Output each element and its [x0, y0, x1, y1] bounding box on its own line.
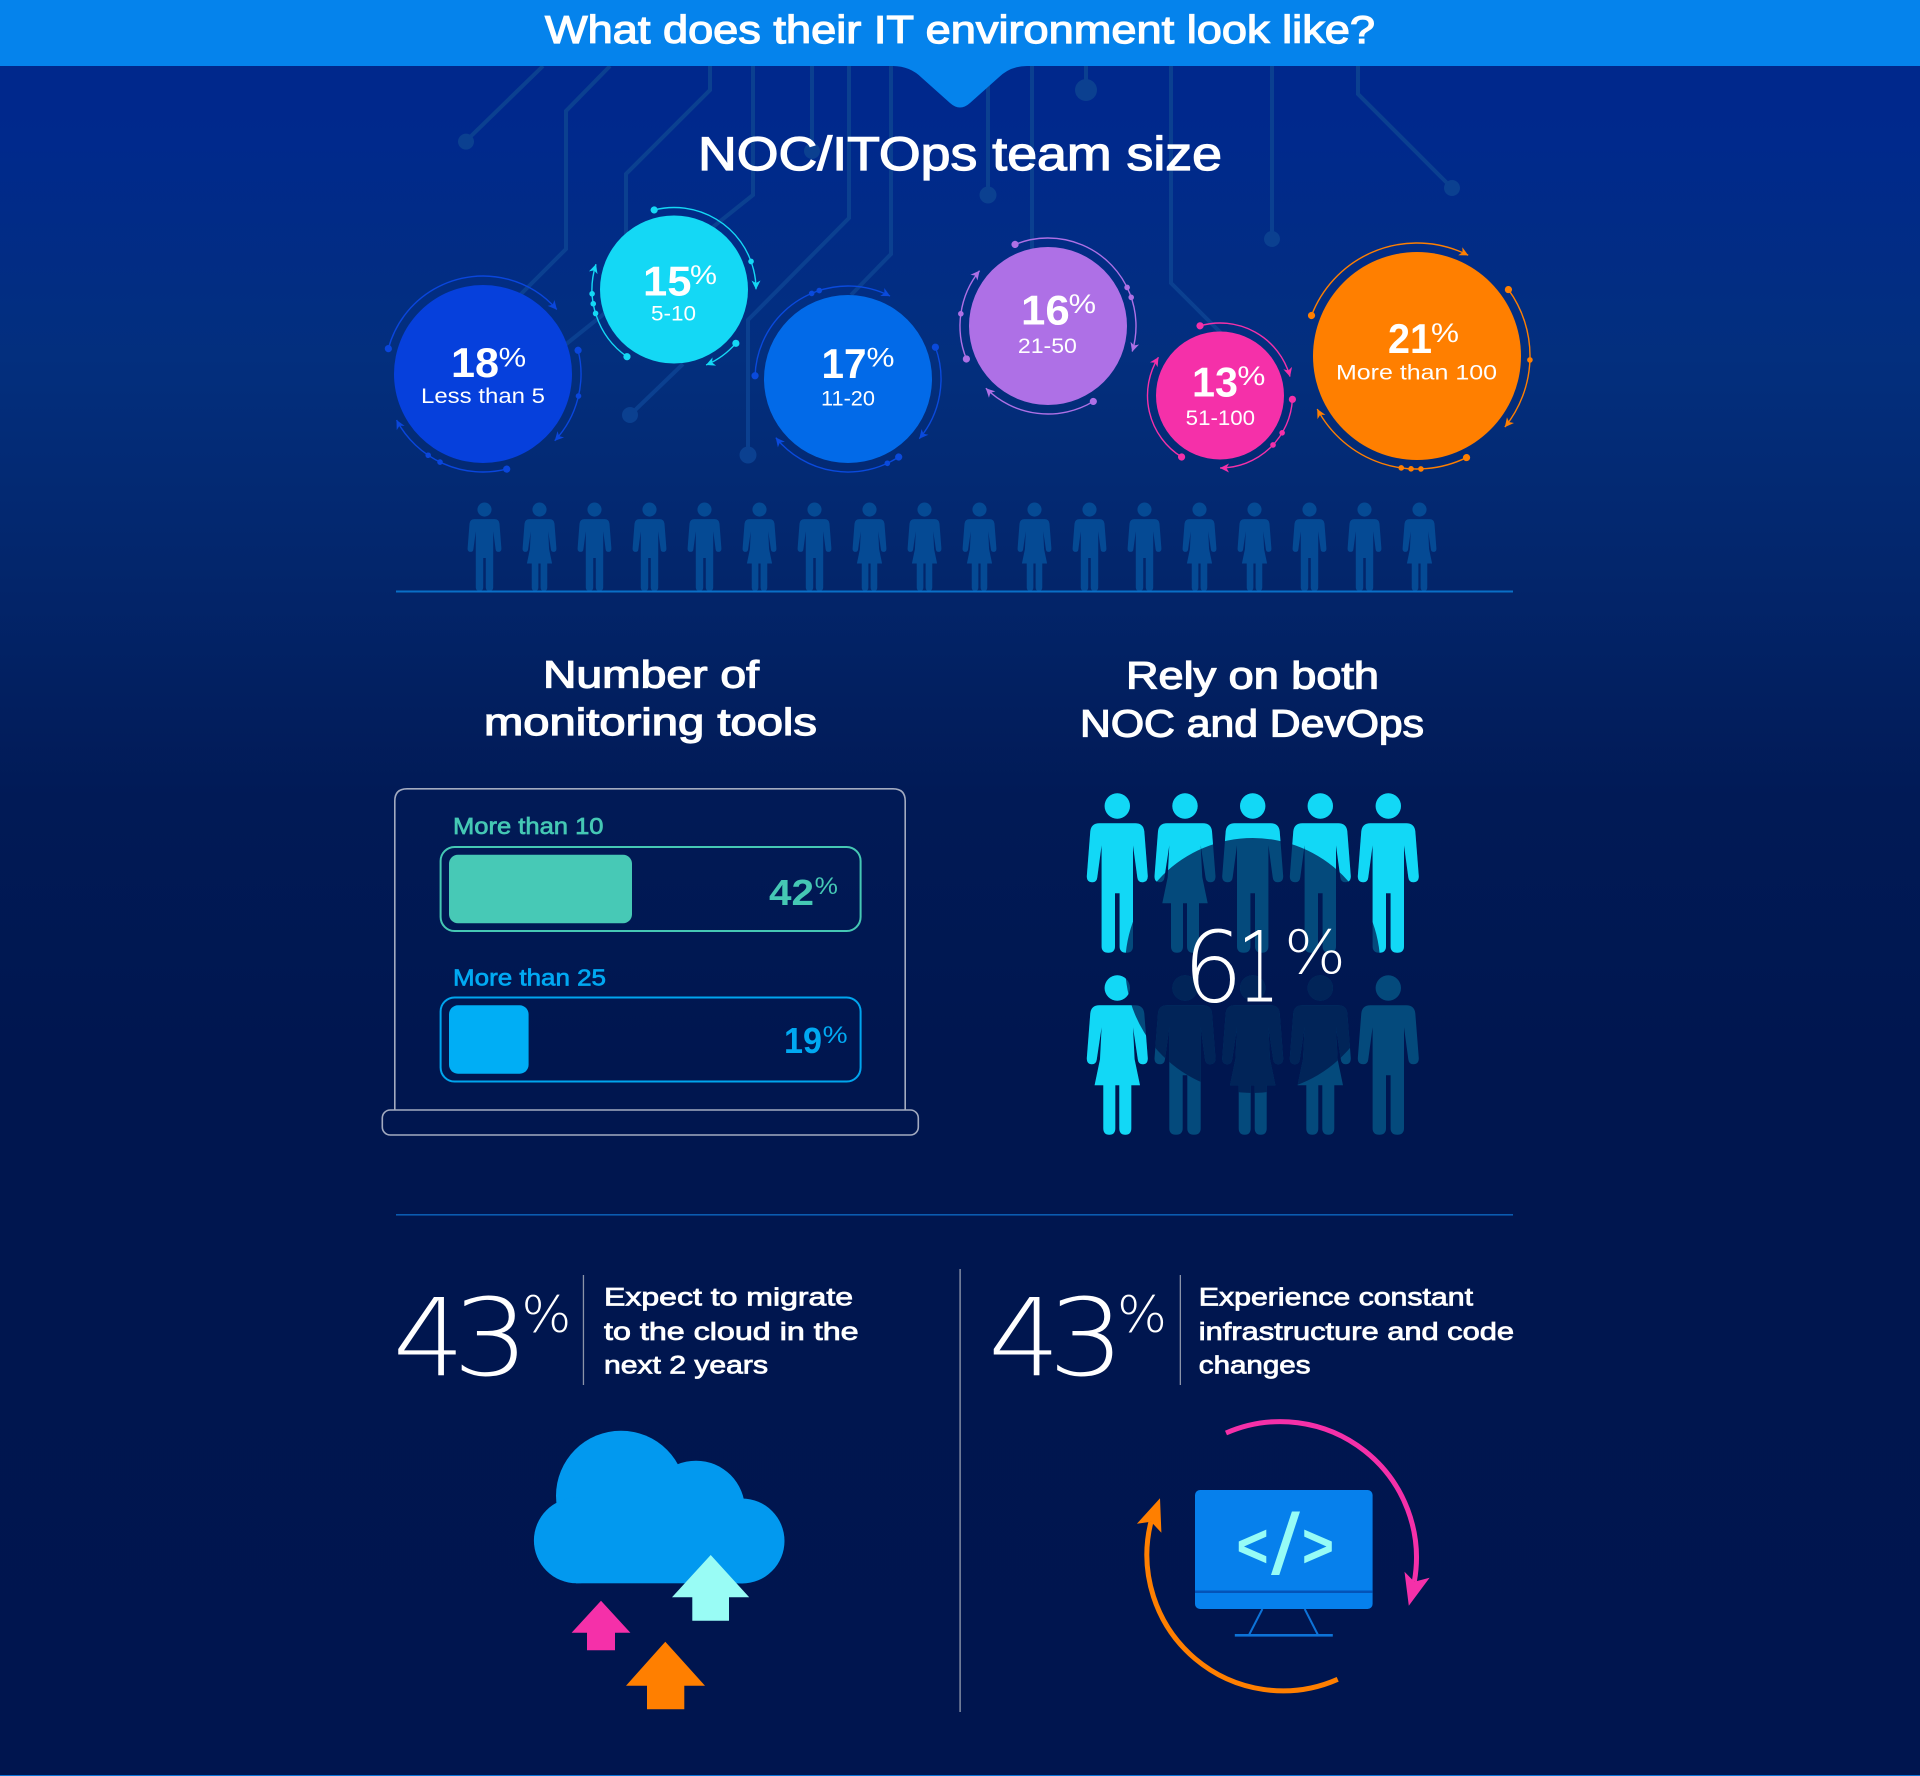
- stat: 43% constant changes: 3: [1048, 1277, 1125, 1401]
- laptop chart: monitoring tools: [382, 789, 918, 1135]
- bubble: 21% more than 100: %: [1431, 318, 1459, 348]
- 61% label: [1183, 912, 1346, 1026]
- heading: number of monitoring tools: monitoring tools: [484, 702, 817, 744]
- heading: rely on both NOC and DevOps: [1080, 655, 1424, 746]
- bubble: 13% 51-100: 51-100: [1186, 406, 1255, 430]
- bubble: 13% 51-100: [1120, 296, 1320, 495]
- bubble: 17% 11-20: 17: [822, 340, 866, 387]
- bar: more than 25: More than 25: [453, 965, 606, 991]
- pink cycle arrow: [1226, 1422, 1430, 1606]
- heading: NOC/ITOps team size: NOC/ITOps team size: [698, 127, 1222, 180]
- orange cycle arrow: [1137, 1498, 1338, 1691]
- heading: rely on both NOC and DevOps: NOC and DevOps: [1080, 704, 1424, 746]
- bubble: 16% 21-50: 16: [1021, 286, 1070, 334]
- bar: more than 25: %: [823, 1022, 848, 1049]
- icon: cloud with upload arrows: [534, 1431, 784, 1709]
- stat: 43% migrate to cloud: %: [521, 1286, 571, 1344]
- bubble: 13% 51-100: 13: [1192, 358, 1238, 406]
- monitor: <: [1236, 1512, 1268, 1581]
- icon: monitor with code and cycle arrows: [1137, 1422, 1430, 1691]
- bar: more than 10: [441, 813, 861, 931]
- monitor: >: [1302, 1512, 1334, 1581]
- stat: 43% migrate to cloud: to the cloud in the: [604, 1318, 859, 1346]
- stat: 43% migrate to cloud: 3: [452, 1277, 530, 1401]
- bubble: 15% 5-10: [558, 174, 790, 405]
- 61% label: 1: [1238, 912, 1280, 1026]
- stat: 43% constant changes: infrastructure and code: [1199, 1318, 1514, 1346]
- heading: number of monitoring tools: [484, 654, 817, 744]
- monitor: /: [1271, 1497, 1300, 1593]
- bubble: 18% less than 5: Less than 5: [421, 384, 545, 408]
- bubble: 15% 5-10: 15: [643, 257, 692, 304]
- vertical centre divider: [959, 1269, 961, 1712]
- bubble: 16% 21-50: [927, 205, 1169, 447]
- bubble: 13% 51-100: %: [1237, 361, 1265, 391]
- banner title: What does their IT environment look like?: [545, 9, 1375, 52]
- bubble: 17% 11-20: %: [866, 343, 894, 373]
- bubble: 16% 21-50: %: [1069, 289, 1096, 319]
- stat: 43% constant changes: 4: [988, 1277, 1060, 1401]
- horizontal divider: [396, 1214, 1513, 1216]
- stat: 43% migrate to cloud: 4: [393, 1277, 465, 1401]
- bubble: 16% 21-50: 21-50: [1018, 334, 1077, 358]
- bar: more than 25: [441, 965, 861, 1082]
- stat: 43% constant changes: Experience constant: [1199, 1284, 1473, 1312]
- stat: 43% migrate to cloud: next 2 years: [604, 1351, 768, 1379]
- bubble: 18% less than 5: 18: [451, 339, 499, 386]
- stat: 43% migrate to cloud: [393, 1275, 859, 1401]
- stat: 43% migrate to cloud: Expect to migrate: [604, 1284, 853, 1312]
- bubble: 17% 11-20: [719, 250, 977, 508]
- 61% label: %: [1284, 918, 1346, 988]
- top banner: [0, 0, 1920, 108]
- stat: 43% constant changes: %: [1117, 1286, 1167, 1344]
- pictogram: 61% rely on both NOC and DevOps: [1087, 793, 1419, 1135]
- bubble: 15% 5-10: %: [690, 260, 717, 290]
- bubble: 18% less than 5: %: [499, 343, 526, 373]
- circuit board lines background: [458, 66, 1460, 464]
- heading: number of monitoring tools: Number of: [543, 654, 760, 696]
- bar: more than 10: More than 10: [453, 813, 604, 839]
- stat: 43% constant changes: [988, 1275, 1514, 1401]
- bubble: 21% more than 100: More than 100: [1336, 361, 1497, 385]
- bar: more than 10: %: [815, 873, 838, 900]
- heading: rely on both NOC and DevOps: Rely on both: [1126, 655, 1379, 697]
- bar: more than 25: 19: [784, 1020, 822, 1061]
- bar: more than 10: 42: [769, 872, 814, 913]
- bubble: 15% 5-10: 5-10: [651, 302, 696, 326]
- stat: 43% constant changes: changes: [1199, 1351, 1310, 1379]
- bubble: 17% 11-20: 11-20: [821, 387, 875, 411]
- row of 18 people silhouettes: [468, 502, 1436, 591]
- bubble: 18% less than 5: [363, 254, 603, 494]
- 61% label: 6: [1183, 912, 1243, 1026]
- monitor: [1195, 1490, 1373, 1637]
- bubble: 21% more than 100: 21: [1388, 315, 1432, 362]
- bubble: 21% more than 100: [1259, 198, 1575, 514]
